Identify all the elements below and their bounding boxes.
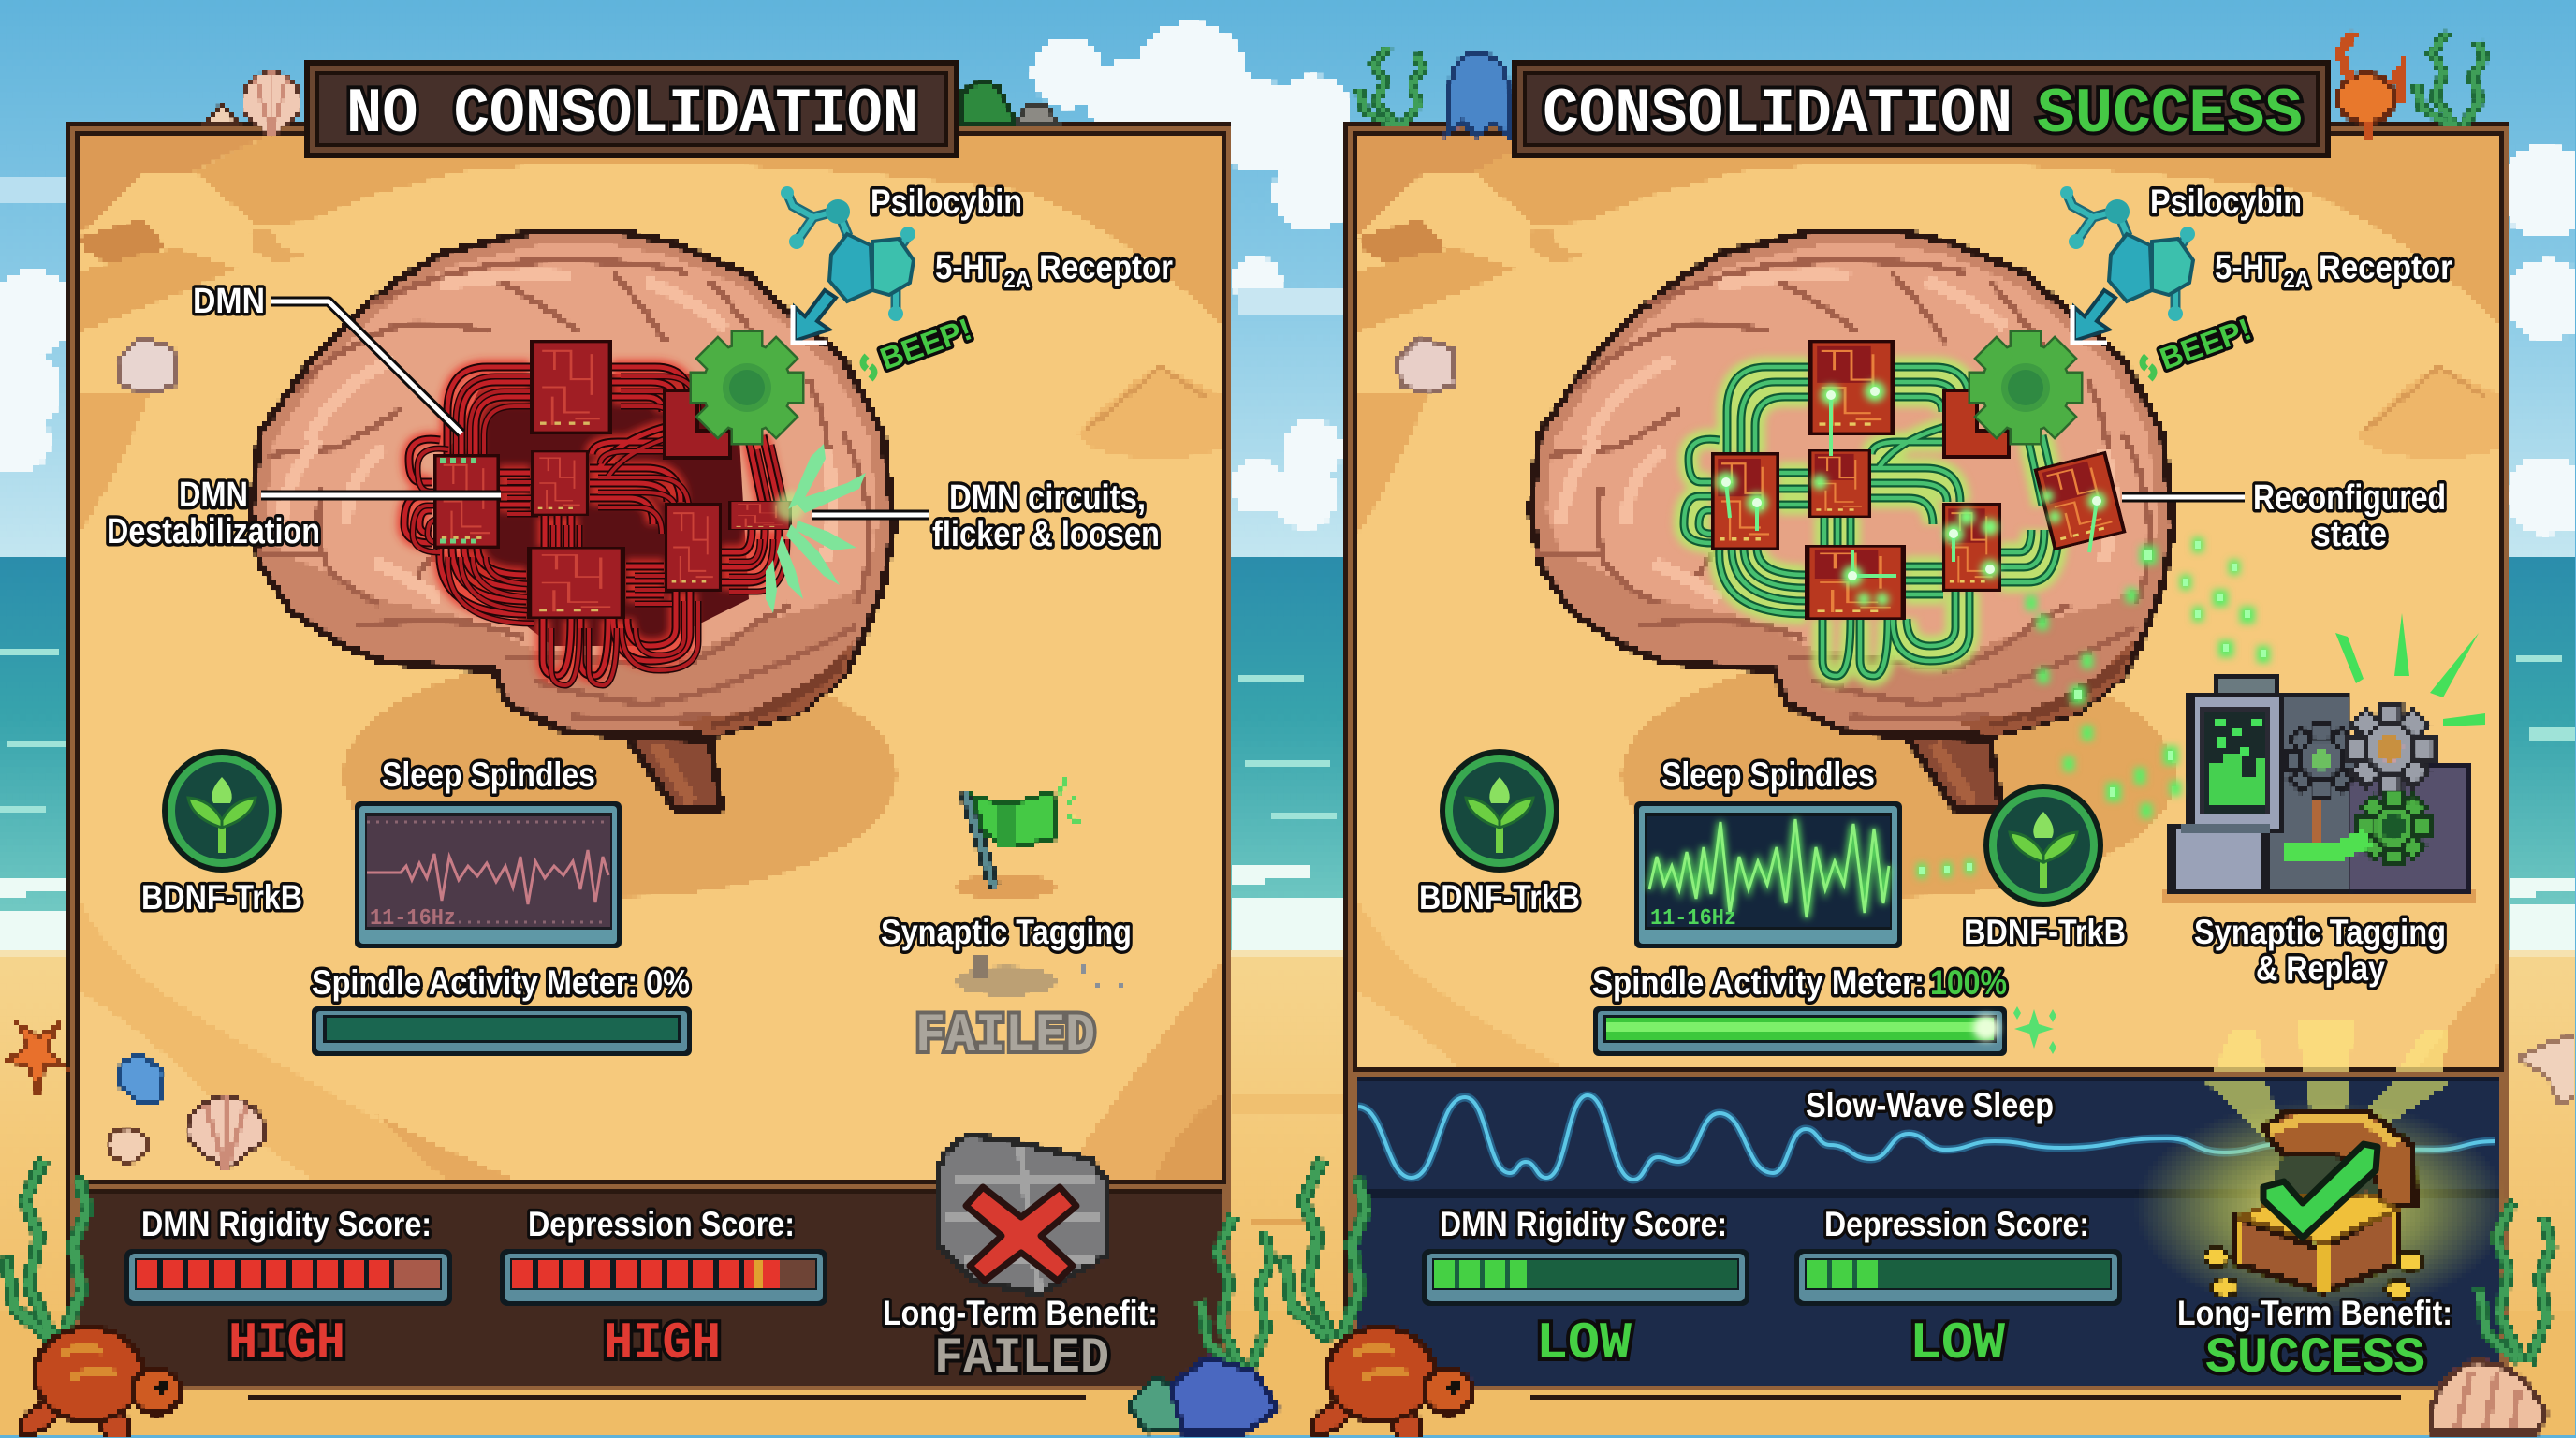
label: Reconfigured state: state bbox=[2313, 515, 2387, 554]
title plaque bbox=[1512, 60, 2331, 158]
label: 5-HT2A Receptor: 5-HT bbox=[2215, 248, 2291, 286]
label: DMN: DMN bbox=[193, 282, 265, 321]
icon: turtle bbox=[1306, 1328, 1472, 1438]
icon: gear bbox=[692, 332, 802, 443]
label: Synaptic Tagging & Replay: Synaptic Tagging bbox=[2194, 913, 2446, 951]
icon: seaweed left bbox=[1286, 1165, 1366, 1334]
label: Slow-Wave Sleep: Slow-Wave Sleep bbox=[1806, 1086, 2054, 1124]
icon: reconfigured chips bbox=[1713, 342, 2124, 619]
leader line: circuits flicker bbox=[812, 509, 929, 521]
label: spindle meter: Spindle Activity Meter: bbox=[1592, 963, 1925, 1002]
title plaque: CONSOLIDATION bbox=[1543, 79, 2012, 151]
label: spindle meter: Spindle Activity Meter: 0% bbox=[312, 963, 690, 1002]
chart: slow-wave line bbox=[1358, 1095, 2496, 1180]
label: BDNF-TrkB: BDNF-TrkB bbox=[141, 878, 302, 917]
label: BEEP: BEEP! bbox=[2155, 312, 2256, 376]
icon: flag planted in sand bbox=[957, 777, 1078, 900]
icon: blue rock bbox=[120, 1053, 164, 1103]
label: depression score: Depression Score: bbox=[528, 1205, 795, 1243]
icon: turtle bbox=[14, 1328, 181, 1438]
label: 5-HT2A Receptor: Receptor bbox=[1031, 248, 1173, 286]
label: DMN rigidity score: DMN Rigidity Score: bbox=[1440, 1205, 1727, 1243]
icon: starfish bbox=[7, 1025, 64, 1095]
icon: circuit traces (glowing green network) bbox=[1684, 367, 2058, 676]
label: DMN Destabilization: Destabilization bbox=[107, 512, 320, 551]
label: Sleep Spindles: Sleep Spindles bbox=[1661, 756, 1875, 794]
icon: machine with gears bbox=[2164, 677, 2478, 902]
leader line: DMN bbox=[271, 301, 461, 433]
label: tagging failed: FAILED bbox=[915, 1006, 1095, 1067]
icon: spiral shell bbox=[2432, 1362, 2546, 1432]
chart: depression bar low bbox=[1794, 1249, 2122, 1306]
label: DMN circuits, flicker and loosen: flicker & loosen bbox=[932, 515, 1160, 554]
icon: glowing nodes on chips bbox=[1716, 381, 2106, 606]
label: Psilocybin: Psilocybin bbox=[2150, 183, 2302, 221]
icon: scallop shell bbox=[187, 1095, 264, 1170]
icon: red X bbox=[966, 1187, 1076, 1281]
chart: flat sleep spindle monitor: 11-16Hz bbox=[370, 906, 456, 932]
icon: psilocybin molecule, receptor and arrow bbox=[781, 186, 915, 379]
icon: green particles bbox=[1917, 537, 2270, 878]
chart: DMN rigidity bar high bbox=[124, 1249, 452, 1306]
label: high: HIGH bbox=[604, 1313, 721, 1373]
chart: flat sleep spindle monitor bbox=[355, 801, 622, 948]
label: Reconfigured state: Reconfigured bbox=[2253, 478, 2446, 518]
icon: green check mark bbox=[2263, 1144, 2378, 1238]
panel: no consolidation bbox=[7, 60, 1278, 1438]
title plaque: NO CONSOLIDATION bbox=[346, 79, 918, 151]
label: DMN Destabilization: DMN bbox=[179, 476, 248, 515]
icon: BDNF-TrkB bbox=[1440, 749, 1559, 873]
panel art: frame, sand and brain bbox=[1286, 33, 2576, 1438]
label: 5-HT2A Receptor: 2A bbox=[1003, 267, 1031, 293]
label: Synaptic Tagging & Replay: & Replay bbox=[2256, 949, 2385, 988]
icon: blue and green rocks bbox=[1128, 1357, 1278, 1432]
chart: spindle activity meter empty bbox=[312, 1006, 692, 1056]
icon: failed tag dust pile bbox=[955, 953, 1124, 996]
icon: seaweed right bbox=[2481, 1206, 2552, 1357]
label: 5-HT2A Receptor: Receptor bbox=[2310, 248, 2452, 286]
label: success: SUCCESS bbox=[2205, 1330, 2425, 1387]
label: failed: FAILED bbox=[934, 1330, 1109, 1387]
label: depression score: Depression Score: bbox=[1824, 1205, 2089, 1243]
label: Sleep Spindles: Sleep Spindles bbox=[382, 756, 595, 794]
label: DMN circuits, flicker and loosen: DMN circuits, bbox=[949, 478, 1146, 518]
label: high: HIGH bbox=[228, 1313, 345, 1373]
panel: consolidation success bbox=[1286, 33, 2576, 1438]
icon: seaweed and octopus left of plaque bbox=[1359, 49, 1509, 136]
title plaque: SUCCESS bbox=[2037, 79, 2303, 151]
title plaque bbox=[304, 60, 959, 158]
icon: small shell bbox=[108, 1128, 147, 1162]
label: low: LOW bbox=[1536, 1313, 1632, 1373]
icon: machine rays and screen particles bbox=[2215, 613, 2485, 756]
icon: seaweed right bbox=[1202, 1221, 1271, 1367]
label: BEEP: BEEP! bbox=[875, 312, 976, 376]
label: long-term benefit: Long-Term Benefit: bbox=[883, 1294, 1158, 1332]
label: Synaptic Tagging: Synaptic Tagging bbox=[881, 913, 1132, 951]
icon: green flicker sparks bbox=[766, 444, 866, 613]
icon: broken grey chest bbox=[938, 1135, 1107, 1294]
leader line: destabilization bbox=[261, 491, 501, 500]
chart: depression bar high bbox=[500, 1249, 827, 1306]
icon: crab and seaweed right of plaque bbox=[2338, 33, 2484, 140]
label: low: LOW bbox=[1910, 1313, 2005, 1373]
icon: red circuit chips bbox=[435, 342, 790, 618]
icon: starfish right bbox=[2518, 1034, 2576, 1105]
chart: active sleep spindle monitor bbox=[1634, 801, 1902, 948]
icon: second BDNF-TrkB bbox=[1983, 784, 2103, 907]
label: DMN rigidity score: DMN Rigidity Score: bbox=[141, 1205, 432, 1243]
chart: DMN rigidity bar low bbox=[1422, 1249, 1749, 1306]
icon: beach decorations on top of panel bbox=[206, 71, 1058, 138]
icon: shell on sand bbox=[117, 337, 176, 393]
leader line: reconfigured state bbox=[2122, 492, 2245, 502]
icon: psilocybin molecule, receptor and arrow bbox=[2060, 186, 2195, 379]
label: BDNF-TrkB: BDNF-TrkB bbox=[1419, 878, 1580, 917]
icon: BDNF-TrkB bbox=[162, 749, 282, 873]
icon: shell on sand bbox=[1397, 337, 1456, 393]
label: long-term benefit: Long-Term Benefit: bbox=[2177, 1294, 2452, 1332]
label: second BDNF-TrkB: BDNF-TrkB bbox=[1964, 913, 2126, 951]
icon: circuit traces (rigid red network) bbox=[404, 367, 787, 685]
icon: treasure chest bbox=[2134, 1020, 2509, 1315]
chart: active sleep spindle monitor: 11-16Hz bbox=[1650, 906, 1736, 932]
label: Psilocybin: Psilocybin bbox=[871, 183, 1022, 221]
label: 5-HT2A Receptor: 5-HT bbox=[935, 248, 1012, 286]
label: 5-HT2A Receptor: 2A bbox=[2283, 267, 2310, 293]
icon: gear bbox=[1970, 332, 2081, 443]
chart: spindle activity meter full bbox=[1593, 1006, 2056, 1056]
label: spindle meter: 100% bbox=[1930, 963, 2007, 1002]
icon: seaweed left bbox=[7, 1165, 87, 1334]
panel art: frame, sand and brain bbox=[7, 71, 1278, 1438]
